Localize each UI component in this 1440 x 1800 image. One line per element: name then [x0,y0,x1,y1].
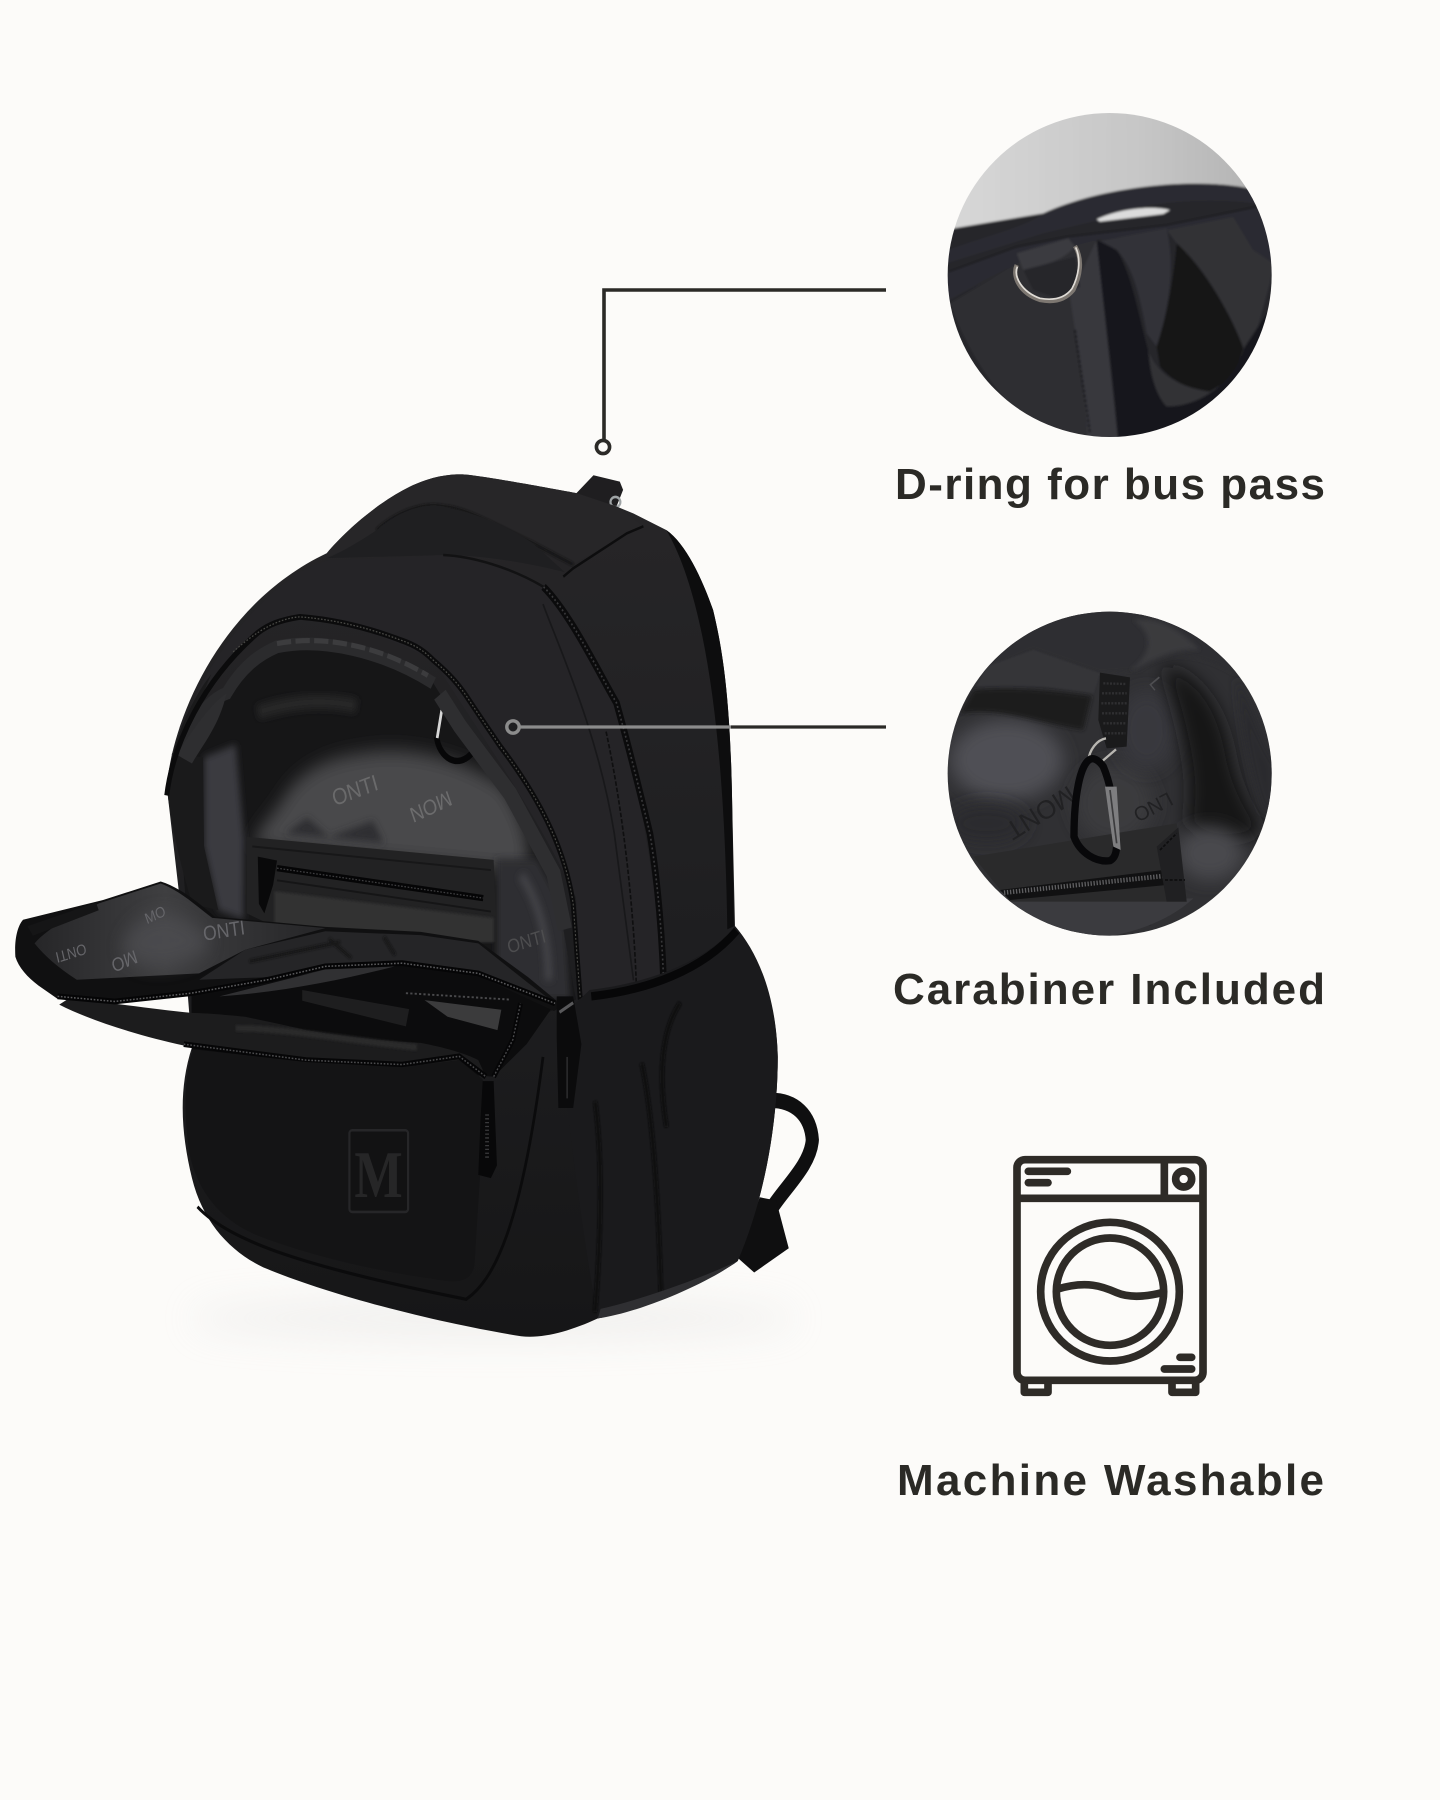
top loop with ring [576,475,623,510]
opening zipper [167,617,580,1000]
fold left [984,654,1094,674]
upper compartment seam and panel [167,555,664,996]
webbing loop [1098,673,1130,748]
right lining area [496,859,570,1000]
front pocket logo: M [354,1139,403,1212]
inset photo: carabiner [943,607,1277,940]
flap brand text: ONTI [202,917,246,946]
flap lower lining wedge [219,966,395,996]
main body silhouette [167,474,778,1337]
zip pocket band [973,823,1187,902]
leader line: carabiner [507,721,886,733]
opening interior lining: MON [407,785,455,826]
second seam band [943,207,1277,303]
lining brand text: ONTI [329,770,381,811]
flap lining [35,883,325,980]
dark strap fold [1097,240,1170,443]
open front flap [15,882,563,1011]
strap lower edge [1148,354,1216,407]
D-ring [1015,246,1080,301]
carabiner [1074,759,1117,861]
fabric sheen patch [395,591,505,681]
main zip pull [557,996,581,1108]
carabiner [437,737,473,761]
lining brand text [1000,673,1176,934]
lower front pocket [186,1049,485,1281]
back panel dark edge [666,530,734,929]
flap brand text: ONTI [54,939,88,965]
ground shadow [186,1298,801,1339]
lining brand text: LNO [1129,787,1176,825]
top fabric [982,612,1238,676]
light lining lower right [1177,827,1243,880]
flap brand text: MO [143,903,168,928]
soft lit lining [252,751,528,872]
folds along pocket edge [285,818,384,843]
leader line: D-ring [596,290,886,454]
left outer wall [167,674,218,910]
main zippers [443,555,544,587]
fold top right [1138,620,1196,666]
pocket zip pull [478,1081,497,1178]
handle band [1050,182,1210,212]
rim ruffle [177,641,565,929]
D-ring tab [1017,238,1075,270]
label: D-ring: D-ring for bus pass [895,460,1325,509]
flap sheen [121,913,209,966]
bottom lining [999,892,1193,936]
lower flap layer [59,998,486,1077]
flap brand text: MO [109,946,140,976]
light lining left [950,720,1063,800]
strap inner [1157,243,1243,392]
interior below flap [191,961,555,1077]
lining brand text: L [1145,673,1167,694]
right textured fabric [1266,738,1272,816]
panel binding [1070,240,1118,443]
opening interior lining [184,650,576,1011]
flap rim [15,882,563,1011]
inset photo: D-ring [943,110,1277,443]
webbing two [1167,217,1273,348]
label: carabiner: Carabiner Included [893,965,1325,1014]
pocket folds [595,1003,680,1312]
dark right shadow [1163,667,1263,840]
top carry handle [327,474,643,577]
lining brand text: MONT [1093,907,1153,934]
flap brand text [54,903,246,976]
shoulder strap [738,1100,812,1273]
inner zip pocket [247,838,494,922]
icon: washing machine [1017,1160,1203,1392]
flap zipper [58,963,555,1003]
blurred background [954,113,1248,230]
main panel left [950,240,1117,443]
webbing one [1100,228,1171,347]
textured rim band [199,931,555,1003]
split ring [1088,738,1116,762]
left blue grey fold [204,744,244,920]
label: machine washable: Machine Washable [897,1456,1324,1505]
lining brand text: MONT [1000,780,1081,846]
side mesh pocket [559,926,778,1318]
backpack illustration [15,474,812,1339]
opening interior lining: ONTI [505,925,548,958]
